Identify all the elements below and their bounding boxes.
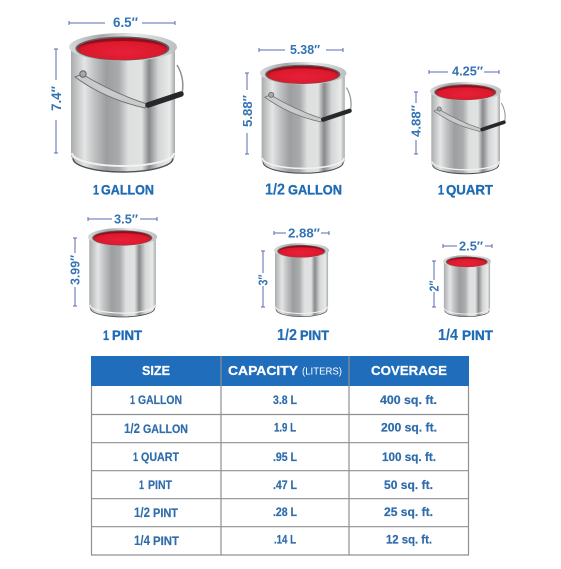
dimension: 1/4 pint width: 2.5″	[459, 240, 483, 254]
can: 1 quart	[430, 82, 505, 174]
table rows	[124, 395, 437, 548]
table rows: 1	[139, 480, 144, 492]
label: 1/4 pint: PINT	[462, 328, 494, 343]
label: 1 pint: PINT	[112, 328, 143, 343]
table rows: 25 sq. ft.	[384, 507, 433, 519]
can: 1 pint	[88, 228, 157, 317]
label: 1/2 gallon: 1/2	[265, 182, 285, 198]
table rows: 1/2	[134, 505, 150, 520]
dimension: 1/2 pint height	[256, 251, 270, 307]
label: 1/2 gallon	[265, 182, 342, 198]
dimension: 1 pint height	[68, 238, 82, 306]
label: 1/2 pint: PINT	[300, 328, 330, 343]
table grid	[91, 356, 469, 555]
dimension: 1/2 gallon height: 5.88″	[241, 95, 255, 127]
can: 1 gallon	[69, 33, 183, 172]
table rows: 1/2	[124, 421, 140, 436]
dimension: 1 gallon width: 6.5″	[113, 15, 139, 30]
dimension: 1 pint height: 3.99″	[68, 255, 82, 285]
dimension: 1/2 gallon width	[259, 43, 343, 57]
can: 1/2 gallon	[260, 62, 351, 173]
table rows: 1.9 L	[274, 422, 296, 434]
dimension: 1/2 pint width	[274, 226, 329, 240]
table rows: PINT	[148, 480, 172, 492]
dimension: 1 quart width: 4.25″	[452, 64, 483, 78]
table rows: 400 sq. ft.	[380, 395, 437, 407]
table rows: 12 sq. ft.	[386, 534, 432, 546]
label: 1 quart: 1	[438, 182, 444, 198]
label: 1 pint: 1	[103, 328, 109, 343]
dimension: 1 pint width: 3.5″	[114, 212, 138, 226]
table rows: 100 sq. ft.	[382, 452, 436, 464]
table header: CAPACITY	[228, 363, 298, 378]
dimension: 1 gallon height	[49, 49, 64, 153]
can: 1/4 pint	[443, 255, 491, 317]
dimension: 1/2 gallon height	[241, 73, 255, 154]
table rows: .47 L	[273, 480, 297, 492]
table rows: QUART	[141, 452, 179, 464]
table rows: 1	[130, 395, 135, 407]
table rows: 1	[133, 452, 138, 464]
table rows: GALLON	[143, 424, 188, 436]
label: 1/2 pint	[277, 327, 330, 344]
dimension: 1 quart height: 4.88″	[410, 105, 424, 137]
table header: (LITERS)	[302, 366, 342, 378]
dimension: 1 quart width	[429, 64, 499, 78]
label: 1/2 gallon: GALLON	[288, 182, 342, 198]
label: 1 gallon: 1	[93, 182, 99, 198]
dimension: 1 gallon height: 7.4″	[49, 85, 64, 111]
label: 1 quart: QUART	[446, 182, 494, 198]
dimension: 1 gallon width	[69, 15, 175, 30]
dimension: 1/4 pint height: 2″	[428, 280, 442, 292]
dimension: 1 quart height	[410, 92, 424, 154]
dimension: 1/4 pint width	[443, 240, 492, 254]
table rows: 1/4	[134, 533, 150, 548]
table rows: 3.8 L	[273, 395, 297, 407]
table rows: .95 L	[273, 452, 297, 464]
dimension: 1/2 pint width: 2.88″	[288, 226, 320, 240]
table: size, capacity and coverage	[91, 356, 469, 555]
label: 1 gallon: GALLON	[101, 182, 154, 198]
can: 1/2 pint	[274, 243, 329, 317]
table header	[91, 356, 469, 386]
table rows: 200 sq. ft.	[381, 422, 437, 434]
table header: SIZE	[142, 363, 170, 378]
dimension: 1/2 pint height: 3″	[256, 274, 270, 286]
table rows: PINT	[153, 536, 179, 548]
table rows: PINT	[153, 508, 178, 520]
label: 1/2 pint: 1/2	[277, 327, 297, 344]
dimension: 1 pint width	[88, 212, 157, 226]
dimension: 1/4 pint height	[428, 261, 442, 307]
table header: COVERAGE	[371, 363, 447, 378]
table rows: GALLON	[138, 395, 182, 407]
table rows: 50 sq. ft.	[384, 480, 433, 492]
table rows: .28 L	[273, 507, 297, 519]
label: 1/4 pint	[438, 327, 494, 344]
label: 1/4 pint: 1/4	[438, 327, 458, 344]
dimension: 1/2 gallon width: 5.38″	[290, 43, 320, 57]
table rows: .14 L	[274, 534, 296, 546]
